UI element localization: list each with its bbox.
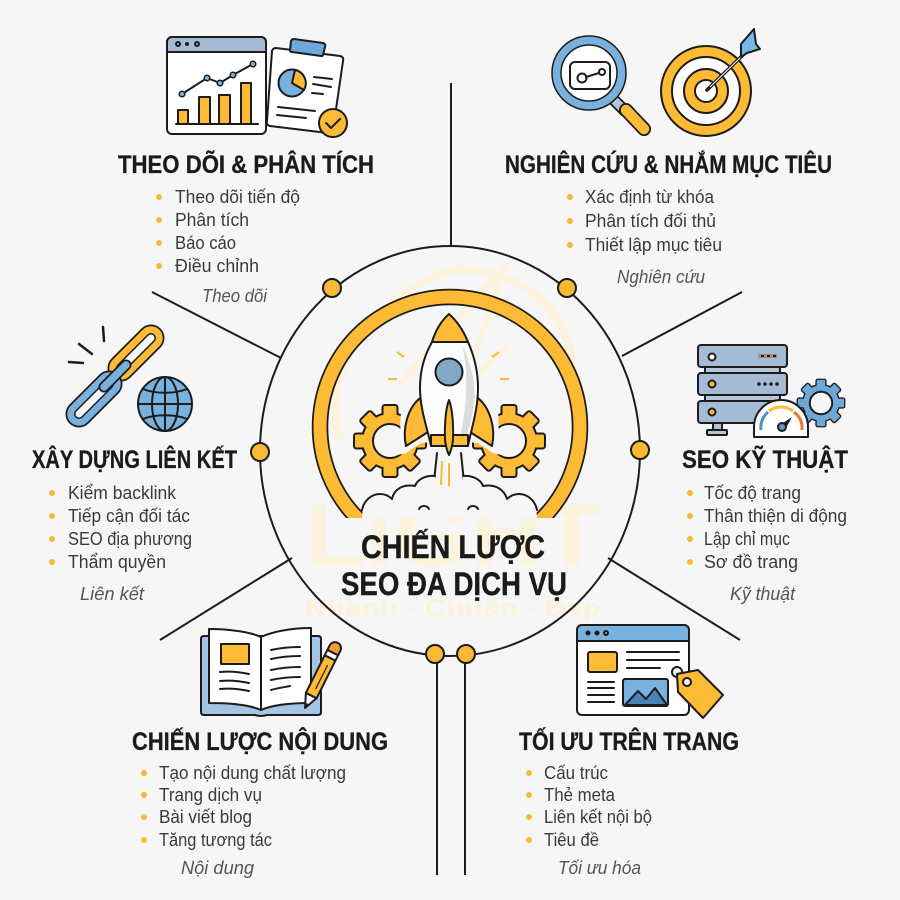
exhaust lines bbox=[434, 453, 464, 497]
panel: chien luoc noi dung bbox=[132, 628, 388, 878]
bullet list: Phân tích đối thủ bbox=[585, 211, 716, 231]
heading: SEO KỸ THUẬT bbox=[682, 444, 848, 474]
bullet list bbox=[567, 187, 722, 255]
panel: theo doi & phan tich bbox=[118, 37, 374, 306]
heading: CHIẾN LƯỢC NỘI DUNG bbox=[132, 726, 388, 756]
bullet list: Tăng tương tác bbox=[159, 830, 272, 850]
watermark: LIGHT logo: Nhanh - Chuẩn - Đẹp bbox=[305, 595, 601, 622]
icon: analytics window and clipboard bbox=[167, 37, 347, 137]
panel: xay dung lien ket bbox=[32, 327, 237, 604]
bullet list bbox=[49, 483, 192, 572]
bullet list: Trang dịch vụ bbox=[159, 785, 262, 805]
bullet list bbox=[141, 763, 346, 850]
watermark: LIGHT logo bbox=[305, 265, 602, 622]
gear openings bbox=[398, 405, 501, 455]
icon: open book and pencil bbox=[201, 628, 343, 716]
icon: chain links and globe bbox=[69, 327, 192, 431]
bullet list: Thiết lập mục tiêu bbox=[585, 235, 722, 255]
central title: SEO ĐA DỊCH VỤ bbox=[341, 566, 567, 602]
panel: nghien cuu & nham muc tieu bbox=[505, 29, 832, 287]
icon: server, gauge and gear bbox=[698, 345, 844, 437]
caption: Nghiên cứu bbox=[617, 267, 705, 287]
smoke cloud outline bbox=[362, 476, 537, 510]
bullet list bbox=[526, 763, 652, 850]
caption: Nội dung bbox=[181, 858, 254, 878]
bullet list: Tiêu đề bbox=[544, 830, 599, 850]
bullet list: Lập chỉ mục bbox=[704, 529, 790, 549]
panel: toi uu tren trang bbox=[519, 625, 739, 878]
yellow ring bbox=[320, 297, 580, 557]
bullet list: Thẻ meta bbox=[544, 785, 616, 805]
bullet list: Thẩm quyền bbox=[68, 552, 166, 572]
central title: CHIẾN LƯỢC bbox=[361, 529, 545, 565]
rocket body bbox=[420, 342, 478, 446]
panel: seo ky thuat bbox=[682, 345, 848, 604]
rocket nose bbox=[432, 314, 468, 342]
spark rays bbox=[388, 352, 509, 379]
bullet list: Phân tích bbox=[175, 210, 249, 230]
caption: Theo dõi bbox=[202, 286, 268, 306]
rocket shading bbox=[458, 345, 474, 444]
smoke cloud bbox=[362, 476, 537, 518]
heading: XÂY DỰNG LIÊN KẾT bbox=[32, 444, 237, 474]
bullet list: Bài viết blog bbox=[159, 807, 252, 827]
bullet list: Theo dõi tiến độ bbox=[175, 187, 300, 207]
connector dots bbox=[251, 279, 649, 663]
bullet list: Thân thiện di động bbox=[704, 506, 847, 526]
bullet list: Liên kết nội bộ bbox=[544, 807, 652, 827]
bullet list: Tiếp cận đối tác bbox=[68, 506, 190, 526]
bullet list: Điều chỉnh bbox=[175, 256, 259, 276]
heading: TỐI ƯU TRÊN TRANG bbox=[519, 726, 739, 756]
bullet list: Kiểm backlink bbox=[68, 483, 177, 503]
bullet list: Xác định từ khóa bbox=[585, 187, 715, 207]
watermark: LIGHT logo: LIGHT bbox=[305, 486, 602, 585]
central rocket emblem bbox=[320, 297, 580, 557]
rocket base bbox=[431, 435, 468, 446]
rocket window bbox=[436, 358, 462, 386]
caption: Kỹ thuật bbox=[730, 584, 796, 604]
icon: magnifier and target bbox=[556, 29, 760, 136]
caption: Tối ưu hóa bbox=[558, 858, 641, 878]
bullet list bbox=[156, 187, 300, 276]
bullet list bbox=[687, 483, 847, 572]
icon: web page and tag bbox=[577, 625, 723, 718]
heading: NGHIÊN CỨU & NHẮM MỤC TIÊU bbox=[505, 149, 832, 179]
bullet list: Cấu trúc bbox=[544, 763, 608, 783]
bullet list: Báo cáo bbox=[175, 233, 236, 253]
hub and spoke connector lines bbox=[152, 83, 742, 875]
bullet list: Tạo nội dung chất lượng bbox=[159, 763, 346, 783]
rocket fins bbox=[405, 398, 493, 446]
centre fin bbox=[445, 400, 453, 455]
right gear bbox=[474, 406, 544, 476]
bullet list: Tốc độ trang bbox=[704, 483, 801, 503]
caption: Liên kết bbox=[80, 584, 145, 604]
left gear bbox=[355, 406, 425, 476]
heading: THEO DÕI & PHÂN TÍCH bbox=[118, 149, 374, 179]
bullet list: SEO địa phương bbox=[68, 529, 192, 549]
bullet list: Sơ đồ trang bbox=[704, 552, 798, 572]
central title bbox=[341, 529, 567, 602]
